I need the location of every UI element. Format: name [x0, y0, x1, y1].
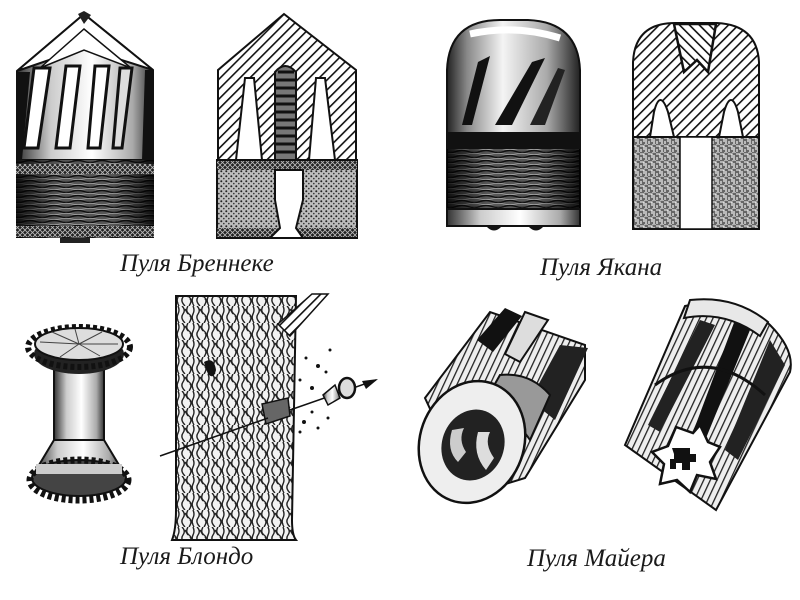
illustration: Yakan slug cross-section	[633, 23, 759, 229]
illustration: Brenneke slug exterior	[16, 11, 154, 243]
illustration: Brenneke slug cross-section	[217, 14, 357, 238]
illustration: Mayer slug, rear view	[625, 299, 791, 510]
illustration: Mayer slug, front view	[402, 308, 588, 518]
caption: Brenneke: Пуля Бреннеке	[119, 250, 274, 277]
caption: Mayer: Пуля Майера	[526, 545, 666, 572]
illustration: tree trunk with slug flight	[160, 294, 378, 540]
illustration: Blondeau slug	[28, 327, 130, 500]
illustration: Yakan slug exterior	[447, 20, 580, 230]
caption: Blondeau: Пуля Блондо	[119, 543, 253, 570]
caption: Yakan: Пуля Якана	[539, 254, 662, 281]
